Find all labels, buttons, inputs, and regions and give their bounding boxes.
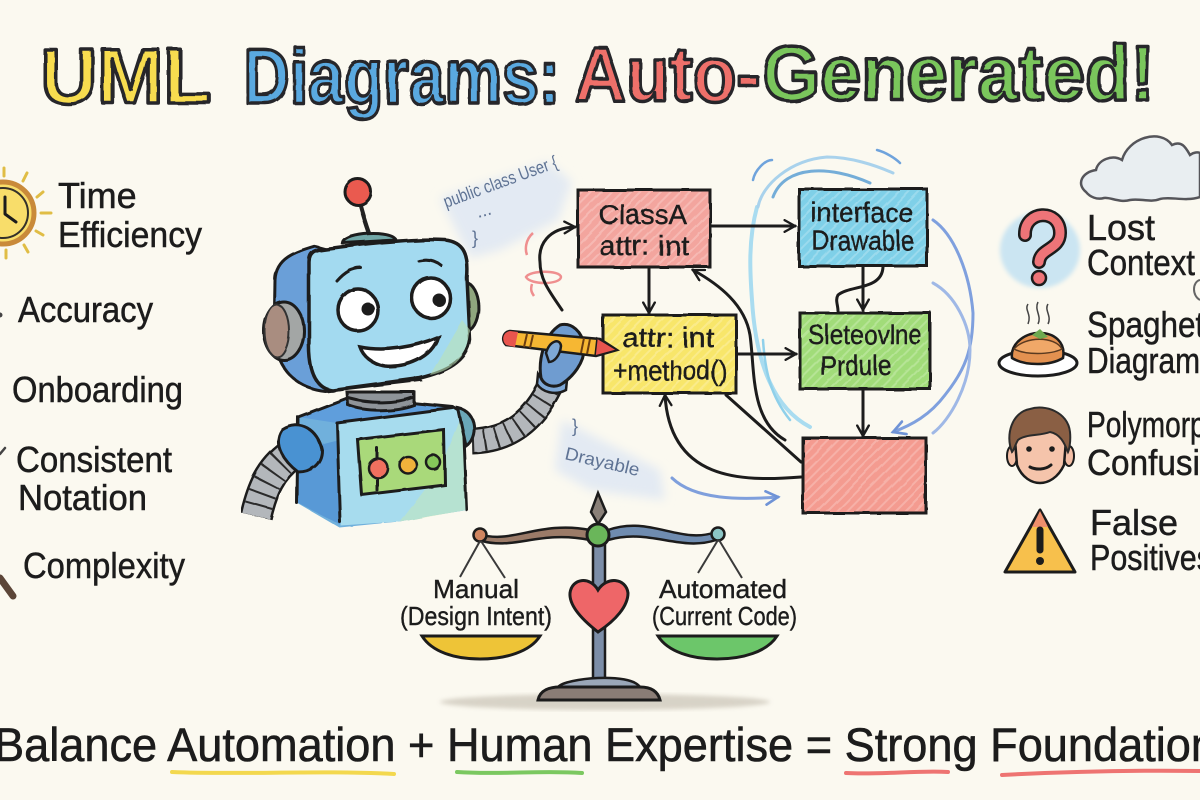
title: UML [40,32,212,120]
icon: clock sun [0,168,51,258]
robot left arm [256,455,291,516]
icon: cloud [1081,136,1200,201]
scale strings [460,540,742,578]
arrow: curved from pencil to ClassA [526,227,575,310]
robot left shoulder [278,425,322,472]
box: Sleteovlne Prdule [800,313,930,389]
label: automated: (Current Code) [652,601,797,631]
robot hand and crayon [503,324,617,393]
box: Sleteovlne Prdule: Sleteovlne [808,319,922,350]
benefit: time efficiency: Efficiency [58,214,202,255]
pan: automated green [658,636,777,659]
pan: manual yellow [422,636,540,659]
robot face [337,260,450,366]
label: automated: Automated [659,574,787,604]
robot right arm [458,383,552,446]
heart [570,581,628,632]
robot left ear [264,302,304,360]
code snippet top: } [472,228,478,248]
box: interface Drawable [799,189,927,266]
robot wrist [537,374,567,393]
icon: question mark [1000,212,1080,288]
robot head [274,240,470,391]
box: Sleteovlne Prdule: Prdule [820,350,892,381]
label: manual [400,574,552,631]
code snippet bottom: } [572,416,578,436]
panel: balance scale [400,493,797,710]
blue flow swooshes [672,150,973,498]
title [40,29,1155,120]
panel: benefits list [0,168,202,596]
panel: risks list [999,136,1200,578]
benefit: onboarding: Onboarding [12,369,183,410]
robot right ear [465,282,479,332]
risk: false positives: False [1090,502,1178,543]
box: ClassA: attr: int [599,230,689,261]
robot antenna [343,179,396,243]
robot chest panel [358,430,445,495]
icon fragment: notation [0,448,5,454]
robot fingers [546,341,561,362]
icon: magnifier handle [0,578,13,596]
label: manual: (Design Intent) [400,601,552,631]
box: attr and method: attr: int [622,322,714,353]
scale beam and post [474,493,724,680]
robot hand [540,324,584,386]
risk: polymorphism confusion [1087,404,1200,483]
scale base [538,678,660,700]
title: Auto- [575,30,760,118]
code snippet top: public class User { [441,152,560,212]
robot neck [347,392,414,410]
box: attr and method: +method() [613,355,727,386]
scale shadow [440,694,770,710]
robot [256,179,552,528]
code snippet bottom: Drayable [563,443,642,480]
box: empty red [803,438,926,513]
UML class diagram [578,189,930,513]
risk: false positives [1090,502,1200,578]
label: manual: Manual [433,574,519,604]
risk: lost context: Lost [1087,207,1155,248]
underlines [172,771,1200,775]
icon: warning triangle [1005,510,1075,572]
crayon [503,331,617,356]
title: Diagrams: [243,32,560,120]
benefit: time efficiency [58,175,202,255]
code snippet top: ... [474,199,494,222]
box: attr and method [603,315,736,393]
small cloud fragment [1194,280,1200,300]
box: ClassA: ClassA [599,199,687,230]
box: ClassA [578,190,710,267]
benefit: complexity: Complexity [23,545,185,586]
risk: lost context [1087,207,1195,283]
icon: confused face [1007,408,1074,483]
benefit: time efficiency: Time [58,175,137,216]
icon: spaghetti plate [999,302,1077,376]
risk: spaghetti diagrams [1087,304,1200,381]
code snippet bottom [555,416,665,500]
label: automated [652,574,797,631]
icon fragment: accuracy [0,312,2,318]
code snippet top [440,152,572,258]
robot body [297,397,467,528]
benefit: consistent notation: Notation [18,477,147,518]
benefit: consistent notation [16,439,172,518]
benefit: accuracy: Accuracy [18,289,153,330]
box: interface Drawable: Drawable [812,225,914,256]
UML connector arrows [649,226,883,479]
box: interface Drawable: interface [811,197,913,228]
title: Generated! [762,29,1155,117]
benefit: consistent notation: Consistent [16,439,172,480]
